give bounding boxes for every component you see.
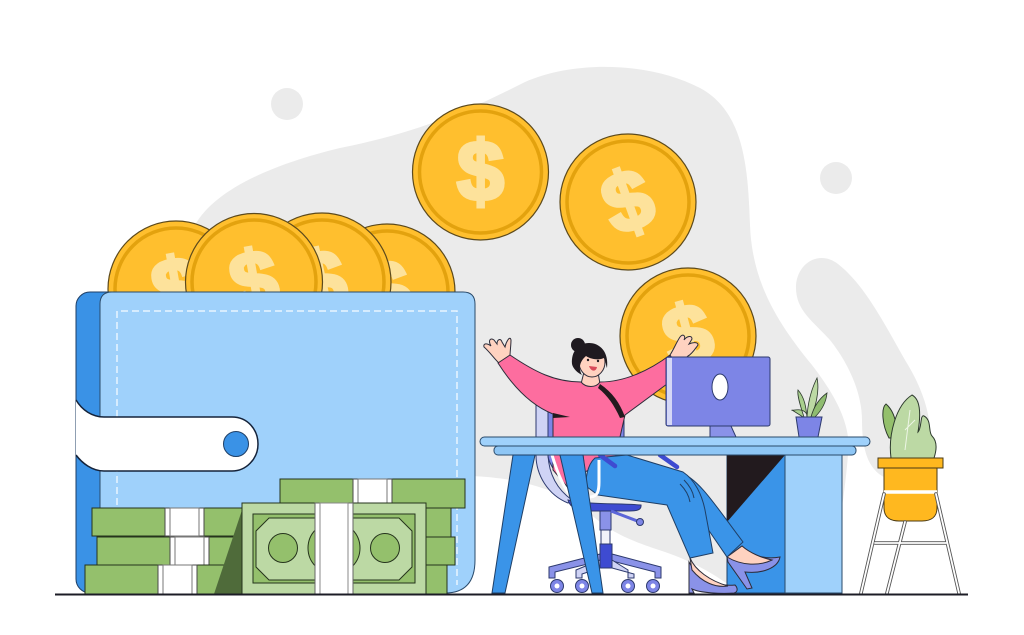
coins in wallet [108,213,455,360]
front banknote [242,503,426,594]
desk top and legs [480,437,870,593]
far leg [680,472,743,557]
head [579,347,605,377]
coin: floating right [560,134,696,270]
coins in wallet: $ [289,230,354,332]
ground line [55,594,968,596]
leaves [883,404,896,438]
chair [536,405,661,592]
bill shadow [214,510,242,594]
near leg and hip [586,455,713,558]
coin: behind woman [620,268,756,404]
small plant [792,378,827,437]
wallet strap [76,400,258,471]
coin: floating left: $ [457,124,504,218]
chair back [536,405,572,503]
desk legs [492,455,535,593]
computer monitor [666,357,770,437]
money stack: left [85,508,242,594]
coin: floating left [412,104,548,240]
chair arm [600,455,677,467]
crossed leg shoe [727,546,780,589]
sweater [498,355,670,437]
plant stand [861,494,959,593]
hair [572,343,607,375]
desk tabletop [494,446,856,455]
neck [581,372,600,387]
chair base [549,554,661,578]
wallet stitching [117,311,457,585]
wallet [76,292,475,593]
sweater below desk [553,455,618,490]
desk pedestal [727,455,842,593]
woman [484,335,780,593]
background blobs [190,67,930,594]
wallet button [224,432,248,456]
coin: behind woman: $ [653,284,722,386]
bag strap [598,384,625,418]
coin: floating right: $ [590,149,666,253]
plant pot [884,467,937,521]
hands [484,338,511,364]
coins in wallet: $ [223,231,285,331]
front shoe [689,562,737,593]
money stack: right [280,479,465,594]
coins in wallet: $ [145,238,207,338]
chair seat and column [568,500,641,511]
potted plant on stand [861,395,959,593]
coins in wallet: $ [354,240,419,342]
